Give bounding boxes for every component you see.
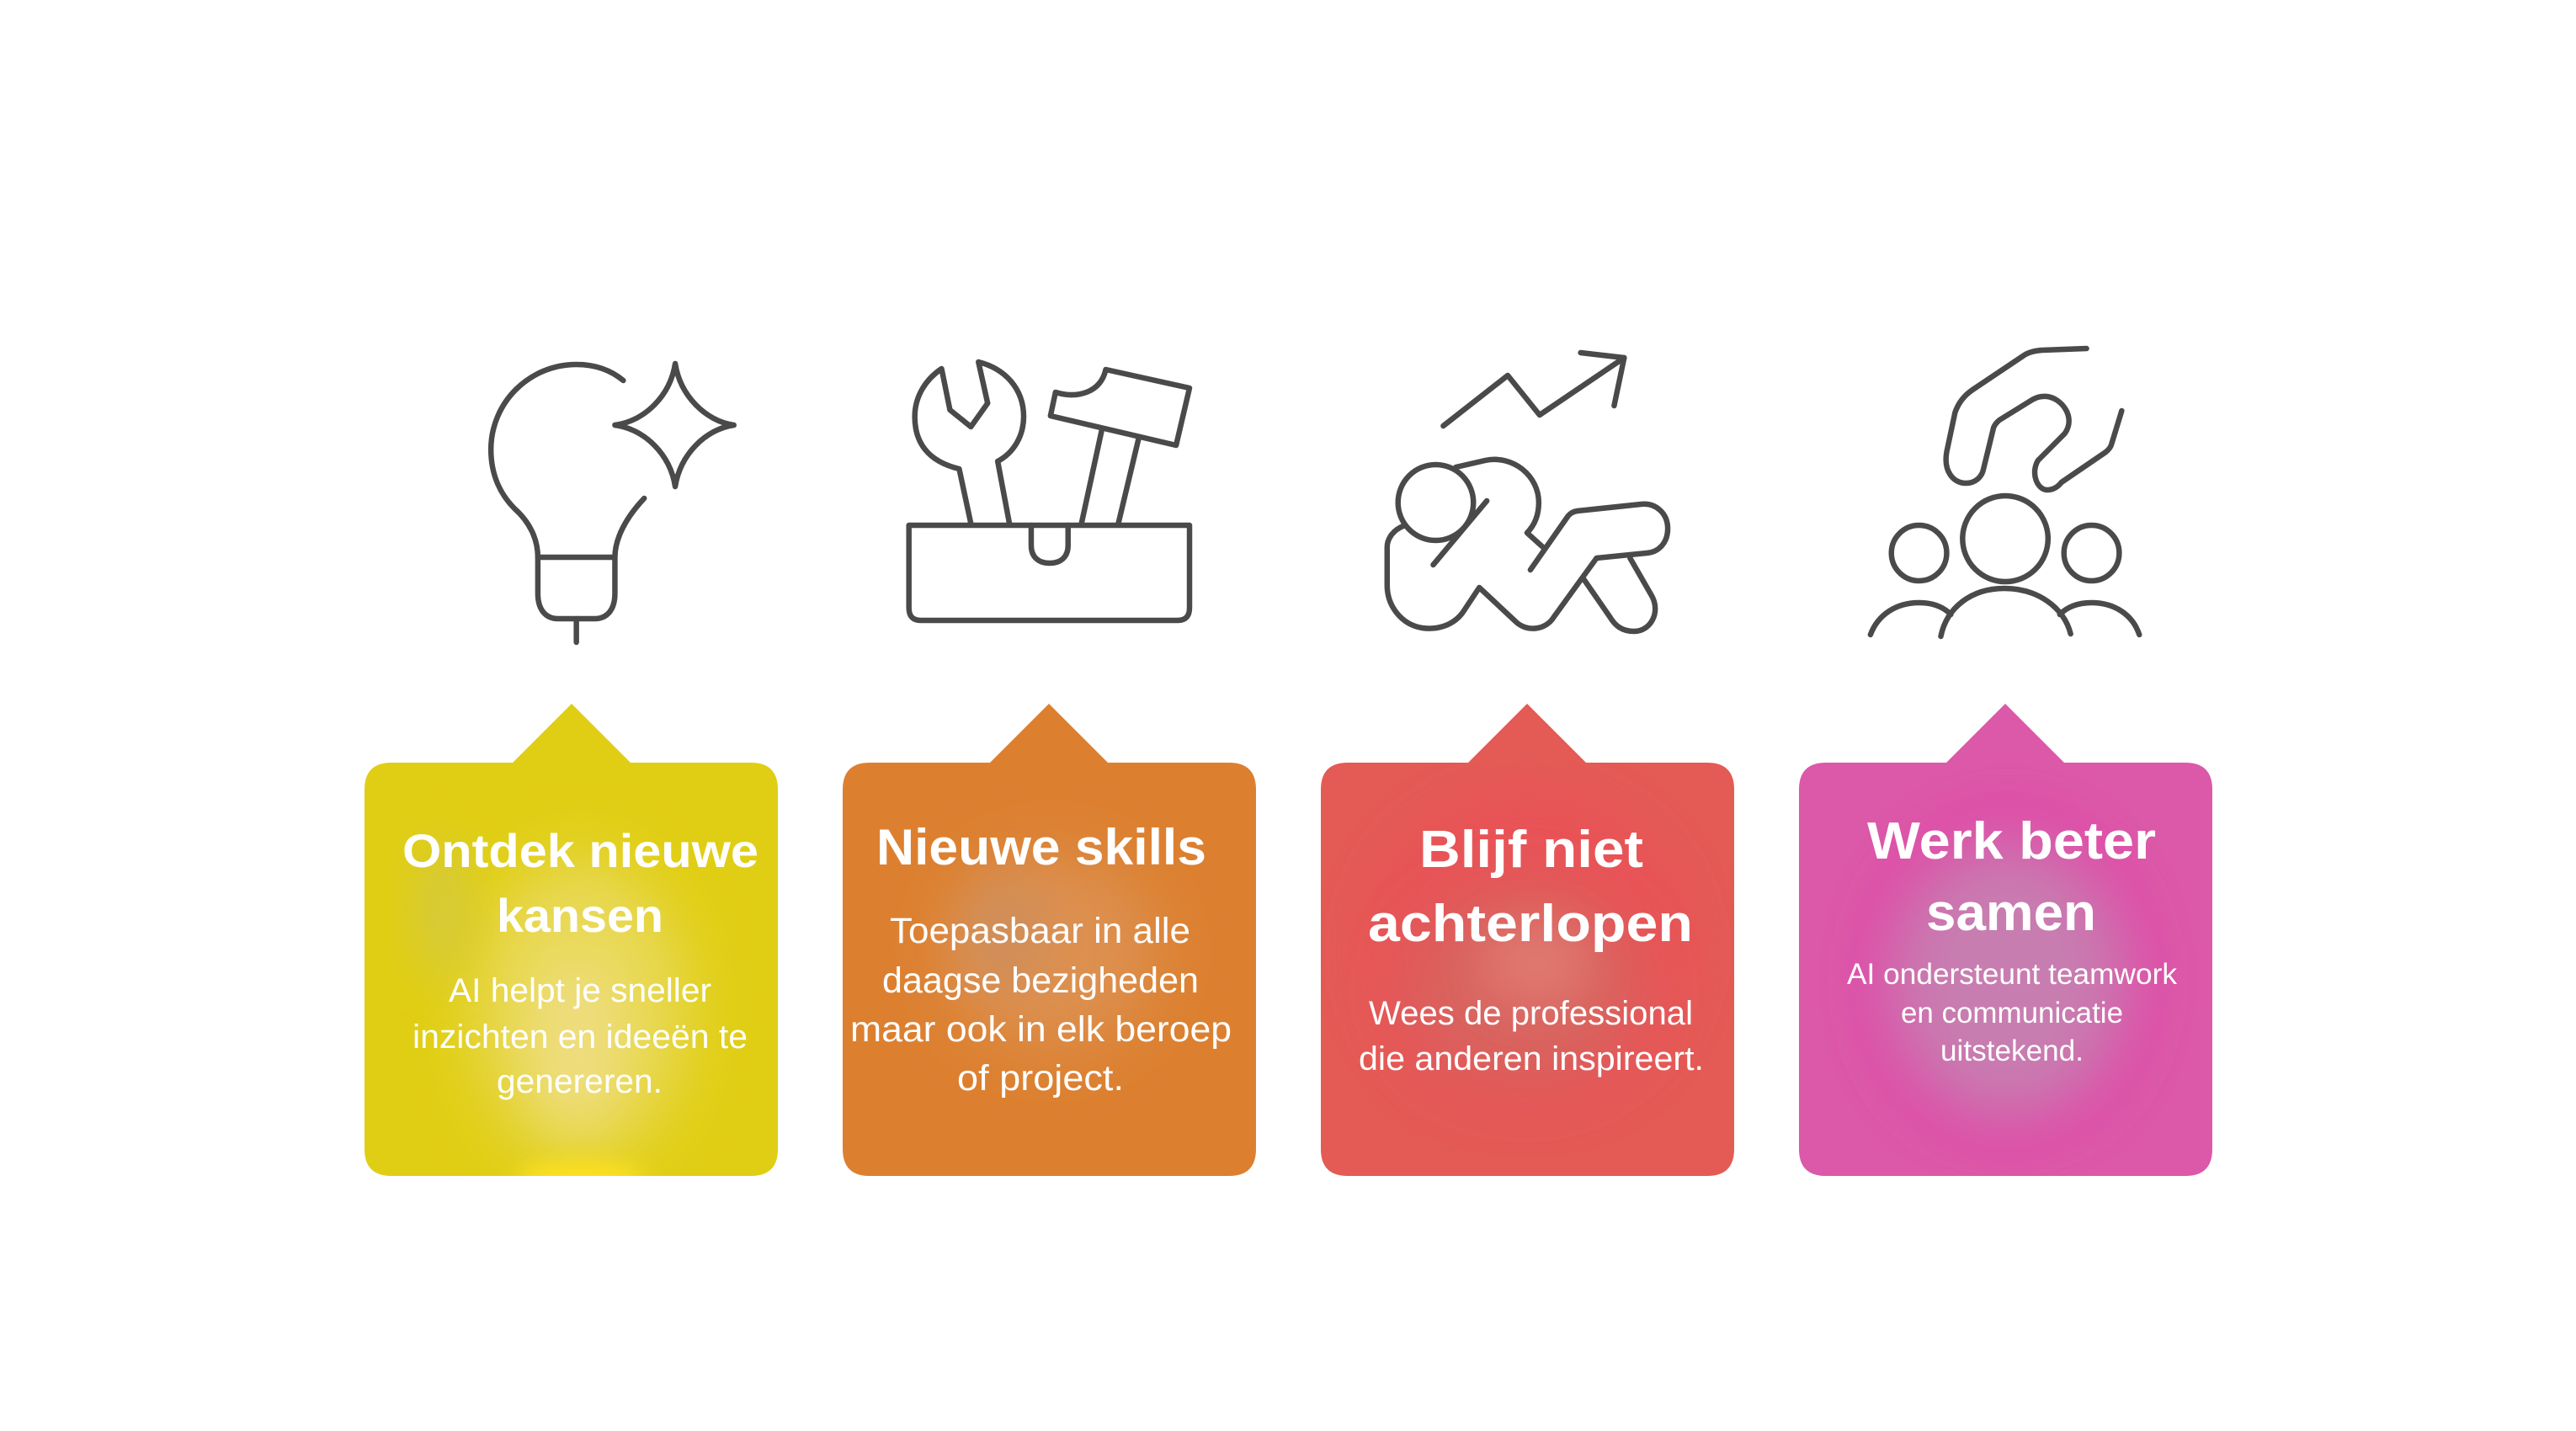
- icon: toolbox with wrench and hammer: [909, 362, 1190, 620]
- body text: maar ook in elk beroep: [850, 1009, 1232, 1050]
- panel: skills: [843, 704, 1256, 1176]
- body text: of project.: [957, 1058, 1124, 1099]
- panel: achterlopen: [1321, 704, 1734, 1176]
- soft glow: yellow: [418, 842, 686, 1197]
- heading: Blijf niet: [1419, 821, 1643, 879]
- soft glow: pink: [1883, 840, 2132, 1121]
- body text: die anderen inspireert.: [1359, 1040, 1704, 1077]
- card shape: yellow: [365, 704, 778, 1176]
- panel: samen: [1799, 704, 2212, 1176]
- heading: Werk beter: [1867, 812, 2156, 870]
- body text: en communicatie: [1901, 997, 2123, 1029]
- body text: AI helpt je sneller: [449, 972, 711, 1009]
- card shape: pink: [1799, 704, 2212, 1176]
- heading: Nieuwe skills: [876, 819, 1206, 875]
- body text: genereren.: [497, 1063, 663, 1100]
- panel: kansen: [365, 704, 778, 1197]
- body text: Wees de professional: [1369, 995, 1693, 1032]
- card shape: orange: [843, 704, 1256, 1176]
- heading: achterlopen: [1368, 895, 1693, 953]
- body text: inzichten en ideeën te: [412, 1019, 748, 1056]
- heading: Ontdek nieuwe: [402, 824, 758, 877]
- body text: uitstekend.: [1940, 1035, 2084, 1067]
- soft glow: orange: [947, 854, 1158, 1048]
- soft glow: red: [1432, 832, 1625, 1064]
- heading: kansen: [497, 889, 663, 942]
- body text: AI ondersteunt teamwork: [1847, 958, 2177, 991]
- card shape: red: [1321, 704, 1734, 1176]
- icon: person with rising arrow: [1387, 353, 1668, 631]
- heading: samen: [1926, 884, 2096, 942]
- icon: team with guiding hand: [1871, 348, 2139, 636]
- icon: light bulb with sparkle: [491, 364, 734, 642]
- body text: daagse bezigheden: [882, 960, 1199, 1001]
- body text: Toepasbaar in alle: [890, 911, 1190, 951]
